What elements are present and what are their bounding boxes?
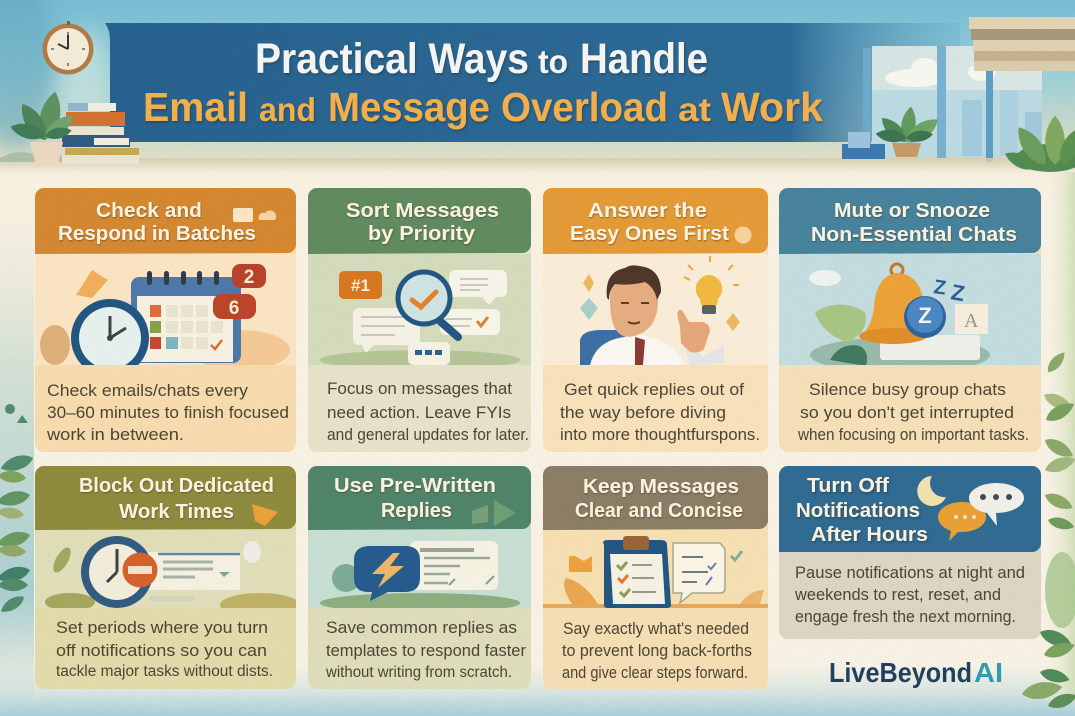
body text: Set periods where you turn: [56, 618, 268, 637]
body text: [325, 618, 526, 681]
body text: Save common replies as: [326, 618, 517, 637]
icon: green arrows: [472, 500, 516, 526]
body text: [46, 381, 289, 444]
title: at: [678, 91, 711, 128]
body text: when focusing on important tasks.: [797, 425, 1029, 444]
panel: keep messages clear and concise: [543, 466, 768, 689]
icon: #1 badge: #1: [351, 276, 370, 295]
body text: into more thoughtfurspons.: [560, 425, 760, 444]
body text: [562, 619, 752, 682]
left foliage: [0, 404, 35, 616]
illustration: magnifier and message bubbles: [320, 270, 520, 370]
icon: badge 2: [232, 264, 266, 288]
title: Email: [143, 84, 248, 130]
illustration: lightning bubble and template card: [320, 541, 520, 613]
body text: [56, 618, 273, 680]
logo: LiveBeyond: [829, 657, 972, 688]
illustration: bell with sleep symbols: Z: [949, 279, 967, 306]
illustration: man with thumbs up and light bulb: [580, 256, 740, 365]
body text: 30–60 minutes to finish focused: [47, 403, 289, 422]
heading: [79, 475, 274, 523]
bush top right: [1002, 116, 1075, 174]
body text: work in between.: [46, 425, 184, 444]
title: Message: [328, 84, 490, 130]
illustration: bell with sleep symbols: [809, 264, 990, 373]
heading: Work Times: [119, 501, 234, 523]
body text: [560, 380, 760, 444]
desk plant and tray: [842, 106, 942, 159]
plant with books: [9, 90, 139, 165]
title: [143, 35, 823, 130]
body text: engage fresh the next morning.: [795, 607, 1016, 626]
panel: use pre-written replies: [308, 466, 531, 689]
illustration: clipboard and message: [543, 536, 768, 608]
right foliage: [1021, 349, 1075, 712]
body text: Silence busy group chats: [809, 380, 1006, 399]
banner: [105, 23, 960, 142]
body text: [797, 380, 1029, 444]
heading: Turn Off: [807, 475, 889, 497]
heading: [570, 200, 729, 245]
body text: weekends to rest, reset, and: [794, 585, 1001, 604]
illustration: bell with sleep symbols: Z: [932, 276, 947, 300]
body text: Focus on messages that: [327, 379, 512, 398]
heading: Mute or Snooze: [834, 200, 990, 222]
heading: by Priority: [368, 223, 476, 245]
floor shelf: [0, 152, 1075, 180]
body text: to prevent long back-forths: [562, 641, 752, 660]
title: and: [259, 91, 316, 128]
heading: Use Pre-Written: [334, 475, 496, 497]
icon: orange chat bubble: [938, 502, 986, 541]
heading: [346, 200, 499, 245]
heading: Notifications: [796, 500, 920, 522]
panel: mute or snooze non-essential chats: [779, 188, 1041, 452]
logo: AI: [974, 657, 1003, 688]
body text: tackle major tasks without dists.: [56, 663, 273, 680]
heading: Check and: [96, 200, 202, 222]
body text: without writing from scratch.: [325, 664, 512, 681]
panel: turn off notifications after hours: [779, 466, 1041, 639]
title: Practical Ways: [255, 35, 529, 83]
panel: sort messages by priority: [308, 188, 531, 452]
body text: Check emails/chats every: [47, 381, 249, 400]
title: Work: [721, 84, 823, 130]
heading: Keep Messages: [583, 476, 739, 498]
illustration: clock with stop sign and notification panel: [45, 536, 296, 608]
body text: Get quick replies out of: [564, 380, 744, 399]
body text: off notifications so you can: [56, 641, 267, 660]
body text: need action. Leave FYIs: [327, 403, 511, 422]
title: Overload: [501, 84, 668, 130]
wall clock: [42, 21, 94, 74]
body text: [327, 379, 529, 444]
body text: and give clear steps forward.: [562, 663, 748, 682]
body text: Say exactly what's needed: [563, 619, 749, 638]
body text: templates to respond faster: [326, 641, 526, 660]
heading: After Hours: [811, 524, 928, 546]
heading: [811, 200, 1017, 246]
title: Handle: [580, 35, 708, 83]
icon: monitor and cloud: [233, 208, 276, 222]
blinds: [969, 17, 1075, 71]
heading: Block Out Dedicated: [79, 475, 274, 497]
illustration: bell with sleep symbols: Z: [918, 303, 932, 328]
icon: orange arrow: [252, 504, 278, 526]
heading: [796, 475, 928, 546]
panel: check and respond in batches: [35, 188, 296, 452]
icon: white chat bubble: [969, 483, 1024, 526]
icon: badge 6: [213, 294, 256, 319]
body text: Pause notifications at night and: [795, 563, 1025, 582]
heading: Easy Ones First: [570, 223, 729, 245]
illustration: bell with sleep symbols: A: [964, 310, 979, 332]
body text: so you don't get interrupted: [800, 403, 1014, 422]
heading: Answer the: [588, 200, 707, 222]
heading: [58, 200, 256, 245]
icon: badge 6: 6: [229, 298, 239, 319]
body text: and general updates for later.: [327, 425, 529, 444]
heading: Respond in Batches: [58, 223, 256, 245]
heading: [334, 475, 496, 522]
title: to: [538, 43, 568, 80]
body text: the way before diving: [560, 403, 726, 422]
panel: answer the easy ones first: [543, 188, 768, 452]
body text: [794, 563, 1025, 626]
heading: Replies: [381, 500, 452, 522]
icon: small plus circle: [734, 226, 752, 244]
icon: #1 badge: [339, 271, 382, 299]
heading: [575, 476, 743, 522]
icon: moon: [917, 476, 946, 506]
heading: Clear and Concise: [575, 500, 743, 522]
heading: Sort Messages: [346, 200, 499, 222]
illustration: clock and calendar: [40, 270, 290, 365]
window scene: [863, 46, 1042, 162]
panel: block out dedicated work times: [35, 466, 300, 689]
icon: badge 2: 2: [244, 267, 254, 288]
heading: Non-Essential Chats: [811, 224, 1017, 246]
